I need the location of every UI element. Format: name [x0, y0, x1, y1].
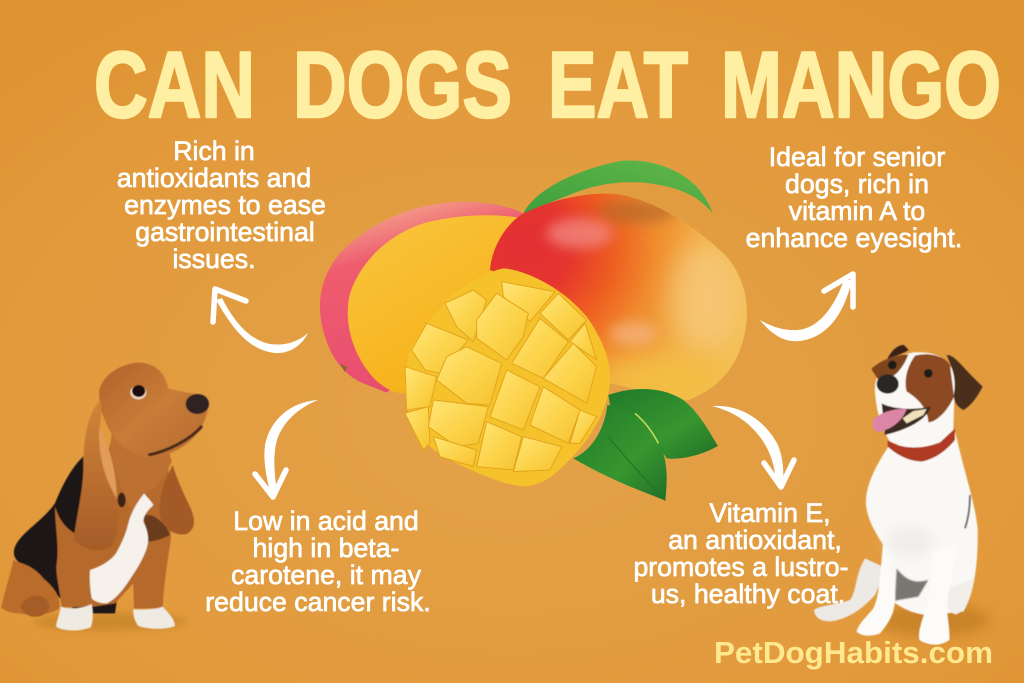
dog front right leg [919, 543, 957, 645]
text block: low acid benefit: reduce cancer risk. [205, 587, 431, 617]
text block: low acid benefit: carotene, it may [231, 560, 422, 590]
dog black back [14, 456, 117, 613]
dog torso [55, 433, 171, 608]
dog ear fold [99, 427, 117, 498]
dog right ear [947, 355, 983, 410]
dog head [99, 363, 208, 458]
illustration: basset hound [1, 363, 209, 631]
dog right ear [159, 465, 194, 534]
dog side stripe [965, 495, 970, 528]
dog rear leg [814, 558, 887, 621]
title: CAN [94, 32, 255, 137]
text block: vitamin E benefit: promotes a lustro- [633, 552, 849, 582]
dog shadow [33, 612, 187, 631]
arrow: to senior dogs text [760, 274, 853, 341]
dog head base [875, 352, 955, 447]
dog left ear [74, 400, 118, 550]
dog belly shadow [895, 568, 928, 601]
dog eye patch [871, 354, 908, 380]
arrow: to low acid text [255, 400, 318, 497]
dog teeth [903, 409, 927, 423]
dog haunch [946, 575, 975, 614]
title [94, 32, 1001, 137]
dog neck [110, 417, 172, 510]
icon: lower leaves [573, 389, 718, 501]
dog left ear [887, 345, 909, 359]
title: DOGS [293, 32, 512, 137]
dog body [866, 432, 978, 616]
dog rear paw [21, 596, 49, 617]
icon: halved mango [320, 202, 523, 393]
text block: antioxidants benefit: issues. [172, 244, 256, 274]
text block: vitamin E benefit [633, 498, 849, 609]
text block: senior dogs benefit: enhance eyesight. [746, 223, 962, 253]
text block: vitamin E benefit: Vitamin E, [709, 498, 831, 528]
text block: antioxidants benefit: gastrointestinal [135, 217, 315, 247]
dog tongue [873, 409, 907, 432]
icon: whole mango [490, 194, 747, 400]
arrow: to vitamin E text [712, 406, 794, 487]
dog eye [130, 385, 146, 399]
dog rear leg [1, 560, 60, 615]
text block: low acid benefit [205, 506, 431, 617]
text block: senior dogs benefit: vitamin A to [789, 196, 925, 226]
illustration: terrier [814, 345, 990, 645]
illustration: mango group [320, 161, 757, 501]
text block: antioxidants benefit [117, 136, 326, 274]
dog collar [888, 428, 955, 462]
text block: antioxidants benefit: Rich in [173, 136, 255, 166]
text block: vitamin E benefit: an antioxidant, [668, 525, 842, 555]
dog mouth line [148, 426, 202, 455]
text block: senior dogs benefit [746, 142, 962, 253]
dog front left leg [857, 542, 895, 636]
dog mouth [882, 403, 931, 435]
text block: low acid benefit: Low in acid and [233, 506, 419, 536]
website credit: PetDogHabits.com [714, 635, 993, 670]
dog white chest [90, 493, 153, 603]
dog chest shading [887, 527, 933, 557]
text block: antioxidants benefit: antioxidants and [117, 163, 311, 193]
dog eyes [888, 361, 933, 378]
dog shadow [877, 603, 990, 637]
icon: cubed mango [405, 268, 610, 486]
text block: senior dogs benefit: Ideal for senior [769, 142, 945, 172]
text block: low acid benefit: high in beta- [253, 533, 399, 563]
dog nose [186, 394, 209, 414]
dog brown patch [906, 354, 954, 422]
dog nose [877, 374, 899, 394]
dog chest shadow [143, 515, 170, 542]
arrow: to antioxidants text [213, 289, 308, 353]
title: EAT [548, 32, 688, 137]
text block: antioxidants benefit: enzymes to ease [124, 190, 326, 220]
dog neck spot [118, 493, 126, 507]
text block: senior dogs benefit: dogs, rich in [785, 169, 929, 199]
dog paws [56, 604, 175, 631]
icon: top leaf [523, 161, 713, 213]
text block: vitamin E benefit: us, healthy coat. [651, 579, 845, 609]
